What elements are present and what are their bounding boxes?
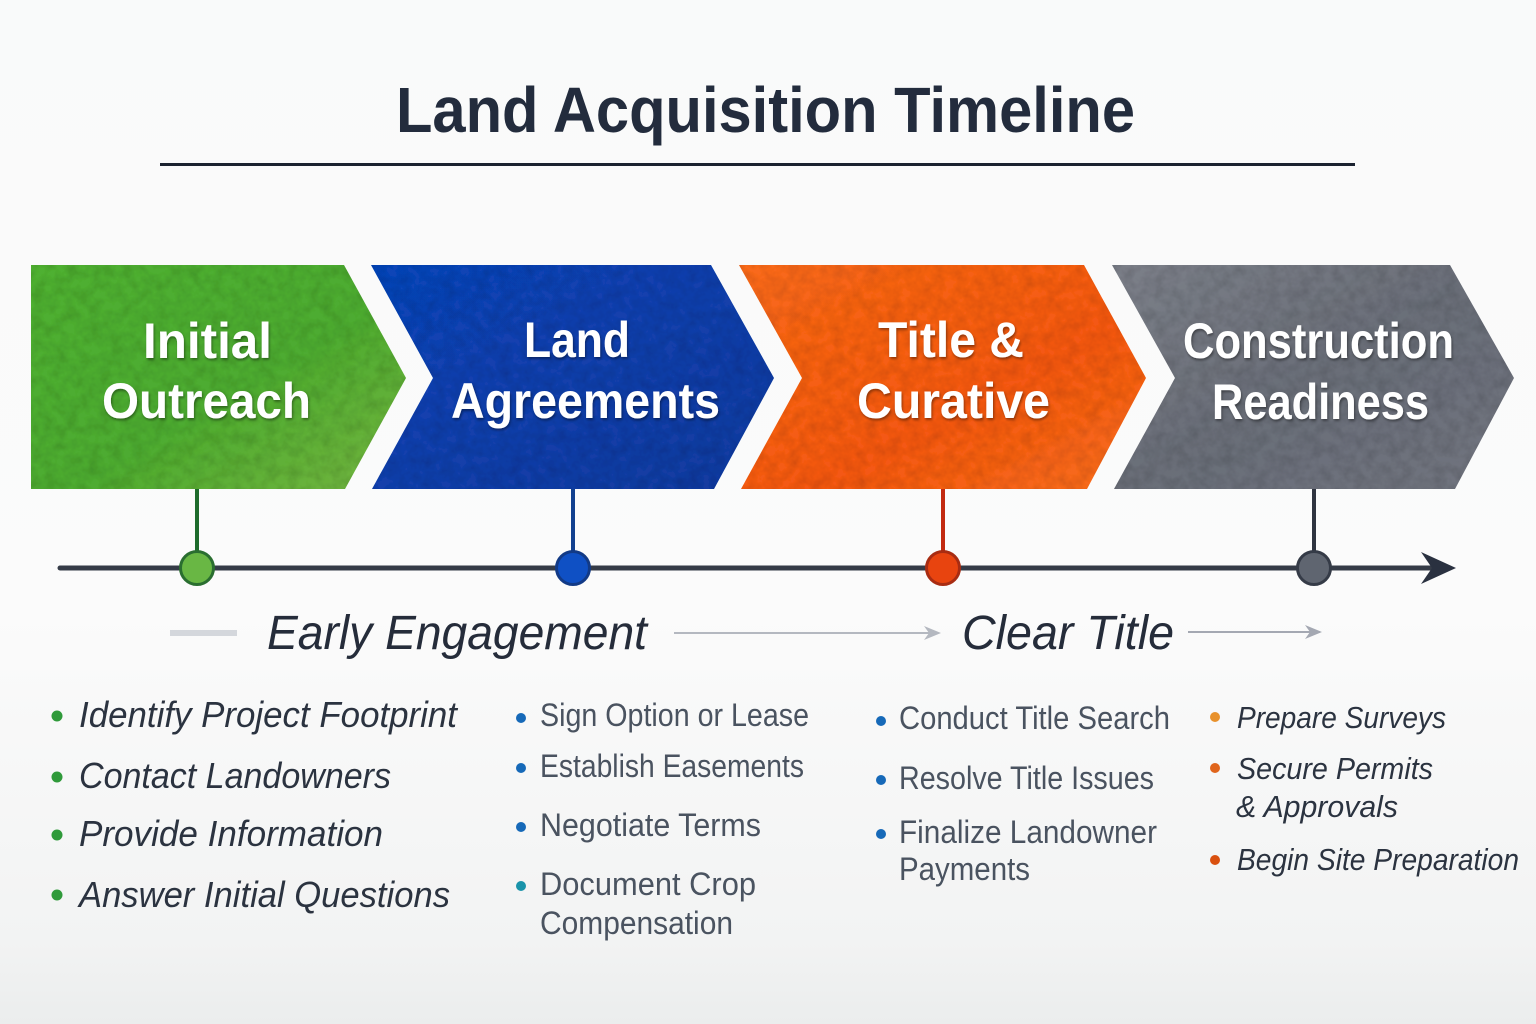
list: Title and Curative tasks: Payments [899, 851, 1030, 887]
heading: Initial Outreach [102, 313, 311, 429]
connector and milestone: grey [1298, 489, 1330, 584]
heading: Land Agreements: Agreements [451, 373, 720, 429]
list: Land Agreements tasks: Establish Easements [540, 748, 804, 784]
chevron: Initial Outreach [31, 265, 406, 489]
heading: Construction Readiness: Readiness [1212, 374, 1429, 430]
panel: Title and Curative stage [739, 265, 1146, 584]
list: Title and Curative tasks: Conduct Title Search [899, 700, 1170, 736]
list: Initial Outreach tasks: Answer Initial Questions [77, 874, 450, 915]
heading: Land Agreements: Land [524, 312, 630, 368]
connector and milestone: red [926, 489, 960, 584]
heading: Land Agreements [451, 312, 720, 429]
list: Construction Readiness tasks: & Approvals [1236, 789, 1398, 824]
chevron: Land Agreements [371, 265, 774, 489]
list: Land Agreements tasks: Compensation [540, 905, 733, 941]
phase label: Early Engagement [170, 607, 941, 660]
panel: Land Agreements stage [371, 265, 774, 584]
panel: Initial Outreach stage [31, 265, 406, 584]
heading: Construction Readiness: Construction [1183, 313, 1454, 369]
chevron: Construction Readiness [1112, 265, 1514, 489]
list: Land Agreements tasks: Document Crop [540, 866, 756, 902]
phase label: Clear Title: Clear Title [962, 607, 1174, 660]
title: Land Acquisition Timeline [396, 74, 1135, 146]
heading: Construction Readiness [1183, 313, 1454, 430]
list: Construction Readiness tasks: Secure Permits [1237, 751, 1433, 786]
connector and milestone: green [180, 489, 214, 584]
list: Initial Outreach tasks: Provide Information [79, 813, 383, 854]
list: Initial Outreach tasks: Contact Landowners [79, 755, 391, 796]
list: Title and Curative tasks [876, 700, 1170, 887]
list: Title and Curative tasks: Resolve Title Issues [899, 760, 1154, 796]
heading: Title & Curative: Title & [878, 312, 1024, 368]
list: Title and Curative tasks: Finalize Landowner [899, 814, 1157, 850]
timeline axis [60, 552, 1456, 584]
list: Land Agreements tasks: Sign Option or Lease [540, 697, 809, 733]
heading: Title & Curative [857, 312, 1050, 429]
heading: Initial Outreach: Outreach [102, 373, 311, 429]
connector and milestone: blue [556, 489, 590, 584]
chevron: Title & Curative [739, 265, 1146, 489]
list: Construction Readiness tasks [1210, 700, 1519, 877]
list: Construction Readiness tasks: Prepare Surveys [1237, 700, 1446, 735]
panel: Construction Readiness stage [1112, 265, 1514, 584]
list: Initial Outreach tasks [52, 694, 459, 915]
list: Land Agreements tasks [516, 697, 809, 941]
list: Land Agreements tasks: Negotiate Terms [540, 807, 761, 843]
list: Initial Outreach tasks: Identify Project Footprint [79, 694, 459, 735]
phase label: Early Engagement: Early Engagement [267, 607, 649, 660]
heading: Title & Curative: Curative [857, 373, 1050, 429]
phase label: Clear Title [962, 607, 1322, 660]
heading: Initial Outreach: Initial [143, 313, 272, 369]
